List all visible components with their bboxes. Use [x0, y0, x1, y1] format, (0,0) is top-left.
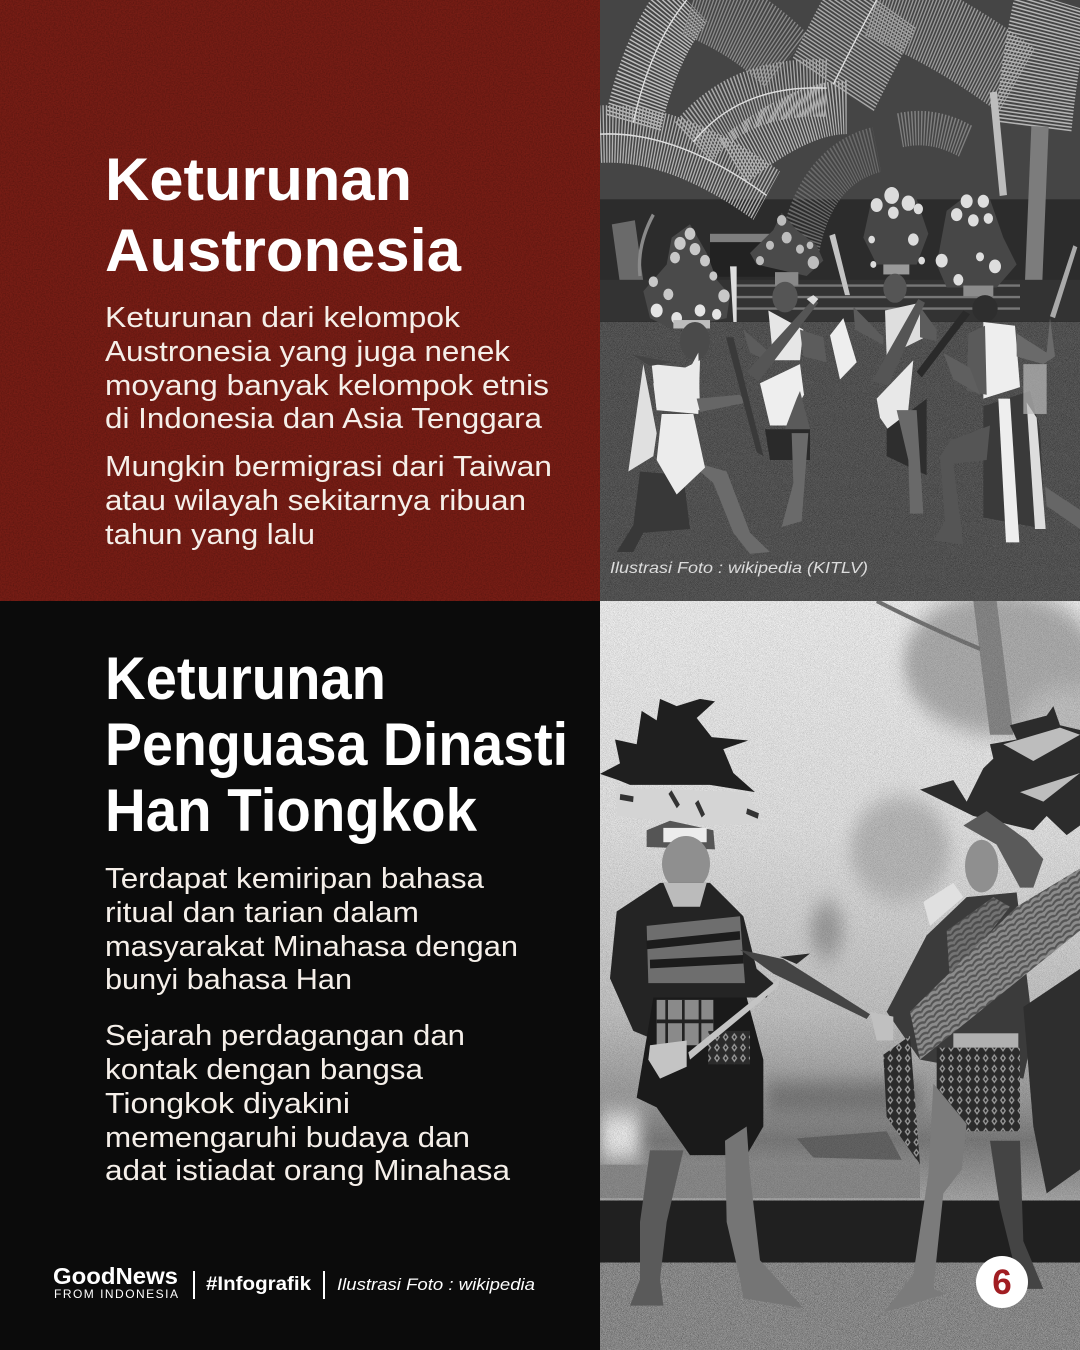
text block: Austronesia origin: di Indonesia dan Asia Tenggara	[105, 403, 543, 435]
text block: migration from Taiwan: Mungkin bermigrasi dari Taiwan	[105, 451, 552, 483]
page number badge	[976, 1256, 1028, 1308]
logo: GoodNews from Indonesia: GoodNews	[53, 1263, 178, 1289]
panel: black Han background	[0, 601, 600, 1350]
text block: trade history: kontak dengan bangsa	[105, 1054, 424, 1086]
text block: language similarity: ritual dan tarian dalam	[105, 897, 419, 929]
text block: trade history	[105, 1020, 511, 1187]
heading: Keturunan Penguasa Dinasti Han Tiongkok: Penguasa Dinasti	[105, 711, 568, 778]
logo: GoodNews from Indonesia	[53, 1263, 178, 1301]
heading: Keturunan Penguasa Dinasti Han Tiongkok: Han Tiongkok	[105, 777, 478, 844]
text block: trade history: adat istiadat orang Minahasa	[105, 1155, 511, 1187]
text block: Austronesia origin: moyang banyak kelompok etnis	[105, 370, 549, 402]
text block: language similarity: masyarakat Minahasa dengan	[105, 931, 518, 963]
text block: migration from Taiwan	[105, 451, 552, 551]
photo: two Minahasa warriors in traditional dress	[600, 601, 1080, 1350]
figure: dancer 2	[726, 213, 827, 527]
photo: Austronesian dancers among palm trees	[600, 0, 1080, 601]
text block: language similarity: bunyi bahasa Han	[105, 964, 352, 996]
ground	[600, 322, 1080, 601]
painted tree backdrop	[600, 591, 1080, 1198]
text block: Austronesia origin	[105, 302, 549, 435]
heading: Keturunan Austronesia	[105, 146, 462, 284]
figure: left warrior	[600, 699, 803, 1308]
heading: Keturunan Austronesia: Austronesia	[105, 217, 462, 284]
text block: trade history: memengaruhi budaya dan	[105, 1122, 470, 1154]
page number badge: 6	[992, 1263, 1012, 1302]
photo credit: Ilustrasi Foto : wikipedia	[337, 1275, 535, 1294]
text block: Austronesia origin: Keturunan dari kelompok	[105, 302, 461, 334]
text block: language similarity: Terdapat kemiripan bahasa	[105, 863, 485, 895]
figure: dancer 4	[917, 194, 1080, 544]
photo caption: Ilustrasi Foto : wikipedia (KITLV)	[610, 560, 868, 577]
text block: trade history: Sejarah perdagangan dan	[105, 1020, 465, 1052]
dark floor band	[600, 1200, 1080, 1263]
floor	[600, 1263, 1080, 1350]
text block: Austronesia origin: Austronesia yang juga nenek	[105, 336, 511, 368]
figure: right warrior	[740, 706, 1080, 1313]
figure: dancer 3	[829, 187, 937, 514]
text block: migration from Taiwan: atau wilayah sekitarnya ribuan	[105, 485, 526, 517]
panel: red Austronesia background	[0, 0, 600, 601]
text block: language similarity	[105, 863, 518, 996]
heading: Keturunan Penguasa Dinasti Han Tiongkok	[105, 645, 568, 844]
footer: brand and credits	[53, 1263, 535, 1301]
text block: migration from Taiwan: tahun yang lalu	[105, 519, 315, 551]
logo: GoodNews from Indonesia: FROM INDONESIA	[54, 1287, 178, 1301]
figure: dancer 1	[617, 224, 770, 554]
text block: trade history: Tiongkok diyakini	[105, 1088, 350, 1120]
hashtag: #Infografik	[206, 1274, 311, 1295]
heading: Keturunan Penguasa Dinasti Han Tiongkok: Keturunan	[105, 645, 386, 712]
heading: Keturunan Austronesia: Keturunan	[105, 146, 412, 213]
